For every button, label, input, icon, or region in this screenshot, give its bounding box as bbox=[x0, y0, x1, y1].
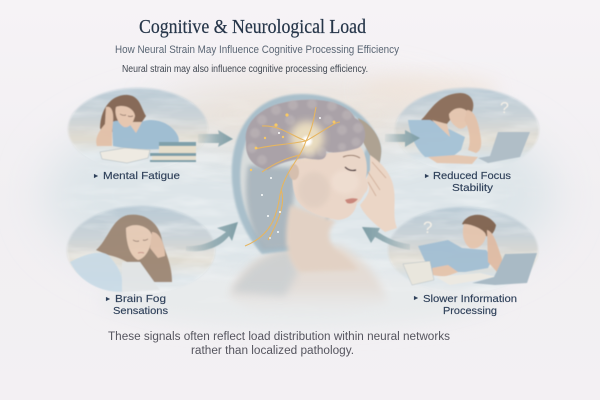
footer note: These signals often reflect load distribution within neural networks bbox=[108, 331, 450, 343]
hair right side bbox=[358, 118, 381, 165]
stacked books bbox=[150, 142, 196, 162]
intro sentence: Neural strain may also influence cognitive processing efficiency. bbox=[122, 64, 368, 75]
woman at laptop bbox=[408, 93, 481, 164]
shoulders and chest bbox=[228, 244, 388, 316]
footer note: rather than localized pathology. bbox=[191, 345, 354, 357]
neural glow bbox=[290, 121, 324, 155]
woman with long hair bbox=[70, 215, 172, 292]
label: slower information processing: Processing bbox=[443, 305, 497, 317]
man leaning over papers bbox=[418, 215, 503, 277]
subtitle: How Neural Strain May Influence Cognitive Processing Efficiency bbox=[115, 44, 399, 56]
hair and back of head bbox=[232, 94, 381, 254]
label: slower information processing: Slower Information bbox=[423, 293, 517, 305]
arrow: slower processing to head bbox=[362, 227, 410, 250]
question mark: ? bbox=[423, 218, 432, 237]
panel: reduced focus stability bbox=[395, 88, 539, 172]
closed eye bbox=[345, 167, 356, 171]
open book bbox=[100, 148, 150, 163]
label: reduced focus stability: Reduced Focus bbox=[433, 170, 511, 182]
laptop bbox=[478, 132, 530, 163]
portrait vignette bbox=[68, 87, 208, 151]
label: slower information processing bbox=[414, 293, 517, 317]
hand at temple bbox=[360, 155, 397, 232]
label: reduced focus stability bbox=[425, 170, 511, 194]
panel: slower information processing bbox=[388, 207, 538, 293]
label: brain fog sensations: Sensations bbox=[113, 305, 168, 317]
footer note bbox=[108, 331, 450, 357]
arrow: brain fog to head bbox=[186, 222, 238, 251]
brain bbox=[245, 99, 365, 246]
ear bbox=[289, 164, 299, 180]
papers bbox=[403, 261, 434, 285]
portrait vignette bbox=[388, 207, 538, 293]
lips bbox=[345, 198, 358, 204]
arrow: fatigue to head bbox=[198, 130, 233, 147]
background with misty cloud band bbox=[36, 69, 564, 327]
face bbox=[292, 146, 368, 220]
title: Cognitive & Neurological Load bbox=[139, 16, 366, 38]
panel: brain fog sensations bbox=[67, 206, 215, 294]
neck bbox=[286, 205, 358, 272]
neural pathways bbox=[245, 107, 340, 246]
label: brain fog sensations bbox=[106, 293, 168, 317]
label: mental fatigue: Mental Fatigue bbox=[103, 170, 180, 182]
portrait vignette bbox=[395, 87, 540, 156]
central head illustration bbox=[228, 94, 397, 316]
eyebrow bbox=[343, 155, 360, 158]
laptop bbox=[472, 253, 537, 285]
portrait vignette bbox=[67, 206, 215, 294]
translucent nape with scattered sparks bbox=[246, 165, 296, 250]
label: brain fog sensations: Brain Fog bbox=[115, 293, 166, 305]
arrow: focus from head bbox=[385, 130, 420, 147]
woman resting head on hand bbox=[96, 95, 179, 149]
label: reduced focus stability: Stability bbox=[452, 182, 494, 194]
panel: mental fatigue bbox=[68, 88, 208, 170]
question mark: ? bbox=[500, 100, 509, 117]
